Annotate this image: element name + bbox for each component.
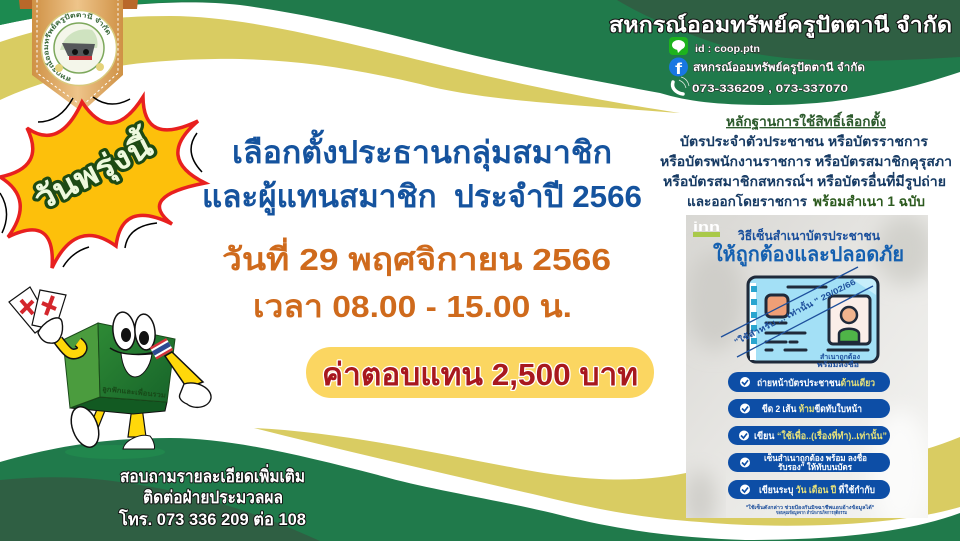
step 2 [728, 399, 890, 418]
step 2: ขีด 2 เส้น ห้ามขีดทับใบหน้า [762, 403, 862, 415]
panel heading: วิธีเซ็นสำเนาบัตรประชาชน [737, 228, 880, 243]
text block: voting evidence: หรือบัตรสมาชิกสหกรณ์ฯ หรือบัตรอื่นที่มีรูปถ่าย [663, 171, 946, 190]
step 4: เซ็นสำเนาถูกต้อง พร้อม ลงชื่อ [764, 451, 867, 464]
badge: cooperative ribbon and seal: สหกรณ์ออมทรัพย์ครูปัตตานี จำกัด [44, 13, 110, 82]
step 4: รับรอง" ให้ทับบนบัตร [778, 462, 852, 472]
date and time: เวลา 08.00 - 15.00 น. [253, 289, 572, 324]
mascot legs [91, 398, 146, 437]
panel logo: inn [693, 219, 720, 234]
mascot box body [70, 397, 167, 414]
mascot: green ballot box character: ลูกฟักและเพื่อนรวม [102, 383, 167, 401]
background: top khaki swoosh [0, 16, 680, 113]
mascot shoes [66, 403, 104, 451]
title: election heading [202, 129, 642, 216]
step 3 [728, 426, 890, 445]
callout: compensation pill [306, 347, 654, 398]
text block: voting evidence: หรือบัตรพนักงานราชการ หรือบัตรสมาชิกคุรุสภา [660, 154, 952, 170]
title: election heading: เลือกตั้งประธานกลุ่มสมาชิก [232, 129, 612, 172]
date and time: วันที่ 29 พฤศจิกายน 2566 [222, 237, 611, 277]
contact: facebook: สหกรณ์ออมทรัพย์ครูปัตตานี จำกัด [693, 61, 865, 75]
contact text: further enquiries: โทร. 073 336 209 ต่อ 108 [118, 509, 306, 529]
panel heading: ให้ถูกต้องและปลอดภัย [713, 242, 904, 268]
panel signature stamp lines: "ใช้สำหรับ ... เท่านั้น " 29/02/66 [732, 275, 858, 347]
mascot arms [58, 340, 82, 354]
step 5 [728, 480, 890, 499]
step 3: เขียน “ใช้เพื่อ..(เรื่องที่ทำ)..เท่านั้น” [754, 428, 887, 442]
text block: voting evidence: บัตรประจำตัวประชาชน หรือบัตรราชการ [680, 134, 929, 149]
panel footnote [746, 503, 874, 516]
header: cooperative name: สหกรณ์ออมทรัพย์ครูปัตตานี จำกัด [609, 13, 952, 39]
title: election heading: และผู้แทนสมาชิก ประจำปี 2566 [202, 179, 642, 216]
mascot flag [150, 338, 173, 360]
background: bottom khaki swoosh [254, 428, 960, 526]
contact: facebook [669, 58, 865, 78]
background: top green wave [0, 0, 960, 105]
contact text: further enquiries: ติดต่อฝ่ายประมวลผล [143, 488, 283, 507]
panel signature stamp lines [721, 267, 873, 369]
panel footnote: *ใช้เซ็นดังกล่าว ช่วยป้องกันมิจฉาชีพแอบอ้างข้อมูลได้* [746, 503, 874, 512]
date and time [222, 237, 611, 324]
mascot face [110, 311, 160, 377]
panel heading [713, 228, 904, 268]
text block: voting evidence: พร้อมสำเนา 1 ฉบับ [813, 194, 925, 209]
text block: voting evidence [660, 111, 952, 209]
contact: line [669, 37, 760, 55]
contact: phone [673, 77, 848, 95]
panel footnote: ขอบคุณข้อมูลจาก สำนักงานกิจการยุติธรรม [776, 509, 847, 516]
text block: voting evidence: และออกโดยราชการ [687, 192, 808, 209]
step 4 [728, 451, 890, 472]
badge: cooperative ribbon and seal [19, 0, 138, 108]
text block: voting evidence: หลักฐานการใช้สิทธิ์เลือกตั้ง [726, 111, 886, 131]
panel ID card illustration [748, 277, 878, 362]
contact: line: id : coop.ptn [695, 43, 760, 55]
step 1 [728, 372, 890, 392]
contact: phone: 073-336209 , 073-337070 [692, 83, 848, 95]
panel signature stamp lines: พร้อมลงชื่อ [817, 359, 859, 369]
panel signature stamp lines: สำเนาถูกต้อง [820, 352, 861, 362]
mascot cards [9, 287, 66, 333]
mascot: green ballot box character [9, 287, 211, 451]
contact: facebook: f [675, 61, 683, 78]
contact text: further enquiries [118, 464, 306, 529]
step 1: ถ่ายหน้าบัตรประชาชนด้านเดียว [757, 377, 875, 389]
panel logo [693, 219, 720, 237]
step 5: เขียนระบุ วัน เดือน ปี ที่ใช้กำกับ [759, 482, 875, 496]
background: bottom green hill [0, 438, 960, 541]
starburst text: วันพรุ่งนี้ [26, 122, 160, 219]
callout: compensation pill: ค่าตอบแทน 2,500 บาท [322, 357, 638, 392]
contact text: further enquiries: สอบถามรายละเอียดเพิ่มเติม [120, 464, 305, 486]
panel: how to certify an ID copy [684, 215, 935, 530]
starburst callout: tomorrow [0, 97, 205, 268]
mascot gloves [38, 318, 62, 343]
